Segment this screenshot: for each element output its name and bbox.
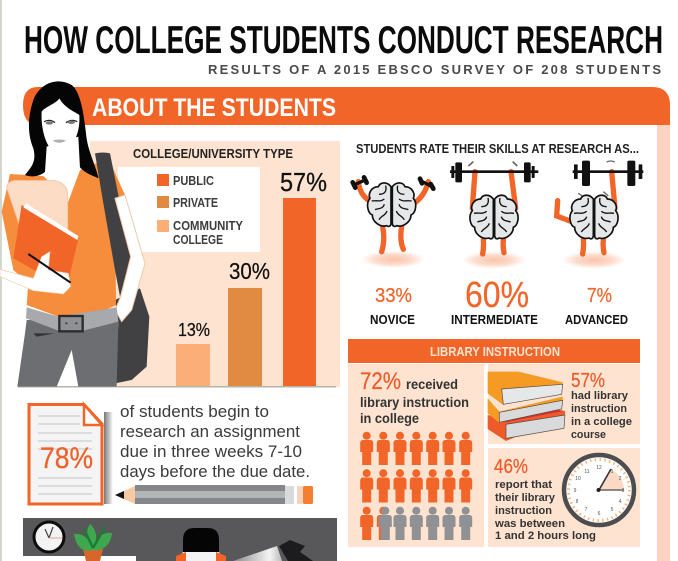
panel: college type chart	[18, 141, 340, 388]
skill percentages: 60%	[465, 274, 529, 315]
icon: wall clock: 1	[611, 469, 614, 475]
icon: pencil	[115, 485, 313, 504]
text: 78 percent description: due in three weeks 7-10	[120, 443, 302, 461]
skill labels: INTERMEDIATE	[451, 313, 538, 327]
legend: PUBLIC	[173, 174, 214, 188]
skill percentages: 7%	[587, 285, 612, 307]
stat: 46 percent	[494, 456, 596, 542]
section header: about the students	[23, 87, 670, 125]
chart heading: COLLEGE/UNIVERSITY TYPE	[133, 147, 293, 161]
icon: document with 78 percent	[29, 404, 113, 504]
text: 78 percent description: research an assignment	[120, 423, 300, 441]
stat: 72 percent: 72%	[360, 368, 401, 395]
panel: dark office scene	[23, 518, 337, 561]
icon: novice brain with dumbbells	[353, 177, 433, 268]
icon: wall clock: 9	[574, 488, 577, 494]
stat: 46 percent: was between	[494, 518, 565, 530]
legend: PRIVATE	[173, 196, 218, 210]
skill labels	[370, 313, 628, 327]
stat: 72 percent	[360, 368, 469, 426]
bars	[18, 198, 336, 388]
icon: wall clock: 8	[576, 499, 579, 505]
icon: potted plant	[74, 524, 112, 561]
stat: 72 percent: library instruction	[360, 394, 469, 410]
right margin strip	[657, 125, 670, 561]
stat: 57 percent: 57%	[571, 370, 605, 392]
legend: COMMUNITY	[173, 219, 244, 233]
bar values: 30%	[229, 258, 270, 284]
text: 78 percent description	[120, 403, 310, 481]
stat: 57 percent: instruction	[571, 403, 627, 415]
icon: wall clock: 3	[622, 488, 625, 494]
legend	[118, 167, 260, 252]
pictogram: 72 percent of people	[360, 432, 472, 540]
stat: 46 percent: 46%	[494, 456, 528, 478]
legend: COLLEGE	[173, 233, 223, 247]
skill labels: ADVANCED	[565, 313, 628, 327]
text: 78 percent description: days before the due date.	[120, 463, 310, 481]
icon: wall clock: 11	[584, 469, 590, 475]
icon: wall clock: 12	[596, 465, 602, 471]
bar values: 13%	[178, 320, 210, 340]
page edge strip	[0, 0, 2, 561]
icon: office clock	[34, 522, 64, 552]
stat: 46 percent: their library	[495, 492, 556, 504]
icon: intermediate brain lifting barbell	[450, 162, 538, 269]
icon: stack of books	[488, 372, 565, 441]
icon: wall clock: 4	[619, 499, 622, 505]
subtitle: RESULTS OF A 2015 EBSCO SURVEY OF 208 STUDENTS	[208, 62, 661, 77]
heading: skills rating: STUDENTS RATE THEIR SKILLS AT RESEARCH AS...	[356, 142, 639, 156]
stat: 72 percent: received	[406, 376, 458, 392]
icon: wall clock: 10	[575, 476, 581, 482]
illustration: person from behind	[176, 528, 226, 561]
panel: library instruction: LIBRARY INSTRUCTION	[430, 344, 560, 359]
icon: wall clock: 6	[598, 511, 601, 517]
bar values	[178, 167, 327, 340]
skill percentages: 33%	[375, 285, 412, 307]
skill labels: NOVICE	[370, 313, 415, 327]
stat: 57 percent: had library	[571, 390, 629, 402]
section header: about the students: ABOUT THE STUDENTS	[92, 94, 336, 122]
text: 78 percent description: of students begin to	[120, 403, 269, 421]
stat: 57 percent: course	[571, 429, 606, 441]
illustration: student with books	[0, 81, 149, 387]
icon: wall clock: 2	[619, 476, 622, 482]
panel: library instruction	[348, 339, 640, 547]
skill percentages	[375, 274, 612, 315]
stat: 46 percent: instruction	[495, 505, 552, 517]
stat: 72 percent: in college	[360, 410, 419, 426]
icon: wall clock	[564, 455, 634, 525]
icon: document with 78 percent: 78%	[40, 442, 93, 475]
icon: advanced brain lifting barbell one-handed	[557, 161, 643, 269]
stat: 57 percent	[571, 370, 632, 441]
illustration: laptop and lamp	[233, 540, 313, 561]
bar values: 57%	[280, 167, 327, 197]
stat: 46 percent: report that	[495, 479, 552, 491]
stat: 57 percent: in a college	[571, 416, 632, 428]
icon: wall clock: 7	[585, 507, 588, 513]
icon: wall clock: 5	[611, 507, 614, 513]
stat: 46 percent: 1 and 2 hours long	[495, 530, 596, 542]
